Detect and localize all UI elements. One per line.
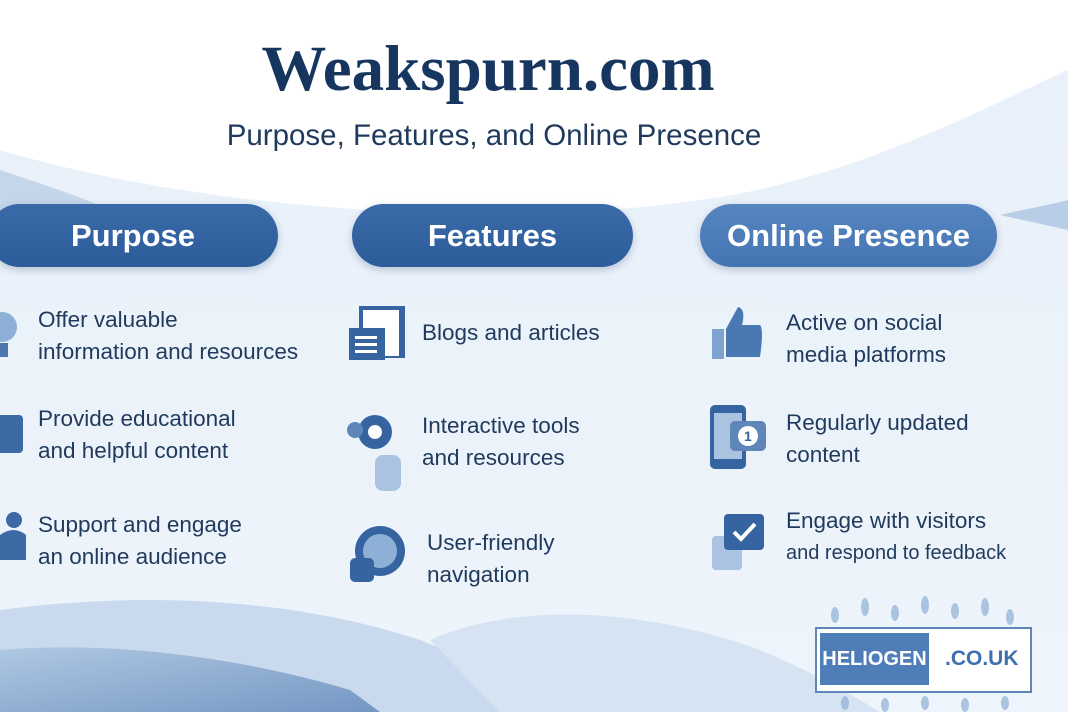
text: online 3: Engage with visitors	[786, 508, 986, 533]
logo: heliogen: .CO.UK	[945, 647, 1018, 670]
pill: Features	[352, 204, 633, 267]
text: purpose 2: and helpful content	[38, 438, 228, 463]
text: features 2: Interactive tools	[422, 413, 580, 438]
text: purpose 3	[38, 512, 242, 569]
text: online 3	[786, 508, 1006, 564]
icon: blog	[349, 306, 405, 360]
logo: heliogen	[815, 596, 1032, 712]
logo: heliogen: HELIOGEN	[822, 648, 927, 670]
pill: Online Presence	[700, 204, 997, 267]
text: purpose 1: information and resources	[38, 339, 298, 364]
title: Weakspurn.com	[261, 33, 715, 105]
text: features 3: navigation	[427, 562, 530, 587]
text: features 2: and resources	[422, 445, 565, 470]
text: features 3	[427, 530, 555, 587]
icon: people	[0, 512, 26, 560]
icon: bulb	[0, 312, 17, 357]
text: online 1	[786, 310, 946, 367]
text: purpose 2	[38, 406, 236, 463]
icon: gear hand	[347, 415, 401, 491]
pill: Online Presence: Online Presence	[727, 218, 970, 252]
text: purpose 2: Provide educational	[38, 406, 236, 431]
icon: chat check	[712, 514, 764, 570]
text: online 2: content	[786, 442, 860, 467]
icon: phone	[710, 405, 766, 469]
pill: Purpose: Purpose	[71, 218, 195, 252]
text: online 1: Active on social	[786, 310, 942, 335]
text: features 2	[422, 413, 580, 470]
text: purpose 1: Offer valuable	[38, 307, 178, 332]
text: purpose 1	[38, 307, 298, 364]
text: purpose 3: an online audience	[38, 544, 227, 569]
text: online 2	[786, 410, 969, 467]
text: online 1: media platforms	[786, 342, 946, 367]
text: purpose 3: Support and engage	[38, 512, 242, 537]
icon: navigation	[350, 526, 405, 582]
text: features 3: User-friendly	[427, 530, 555, 555]
text: online 2: Regularly updated	[786, 410, 969, 435]
text: online 3: and respond to feedback	[786, 542, 1006, 564]
icon: book	[0, 415, 23, 453]
pill: Features: Features	[428, 218, 557, 252]
subtitle: Purpose, Features, and Online Presence	[227, 119, 761, 152]
text: features 1: Blogs and articles	[422, 320, 600, 345]
icon: phone: 1	[744, 428, 752, 444]
pill: Purpose	[0, 204, 278, 267]
icon: thumbs up	[712, 307, 762, 359]
